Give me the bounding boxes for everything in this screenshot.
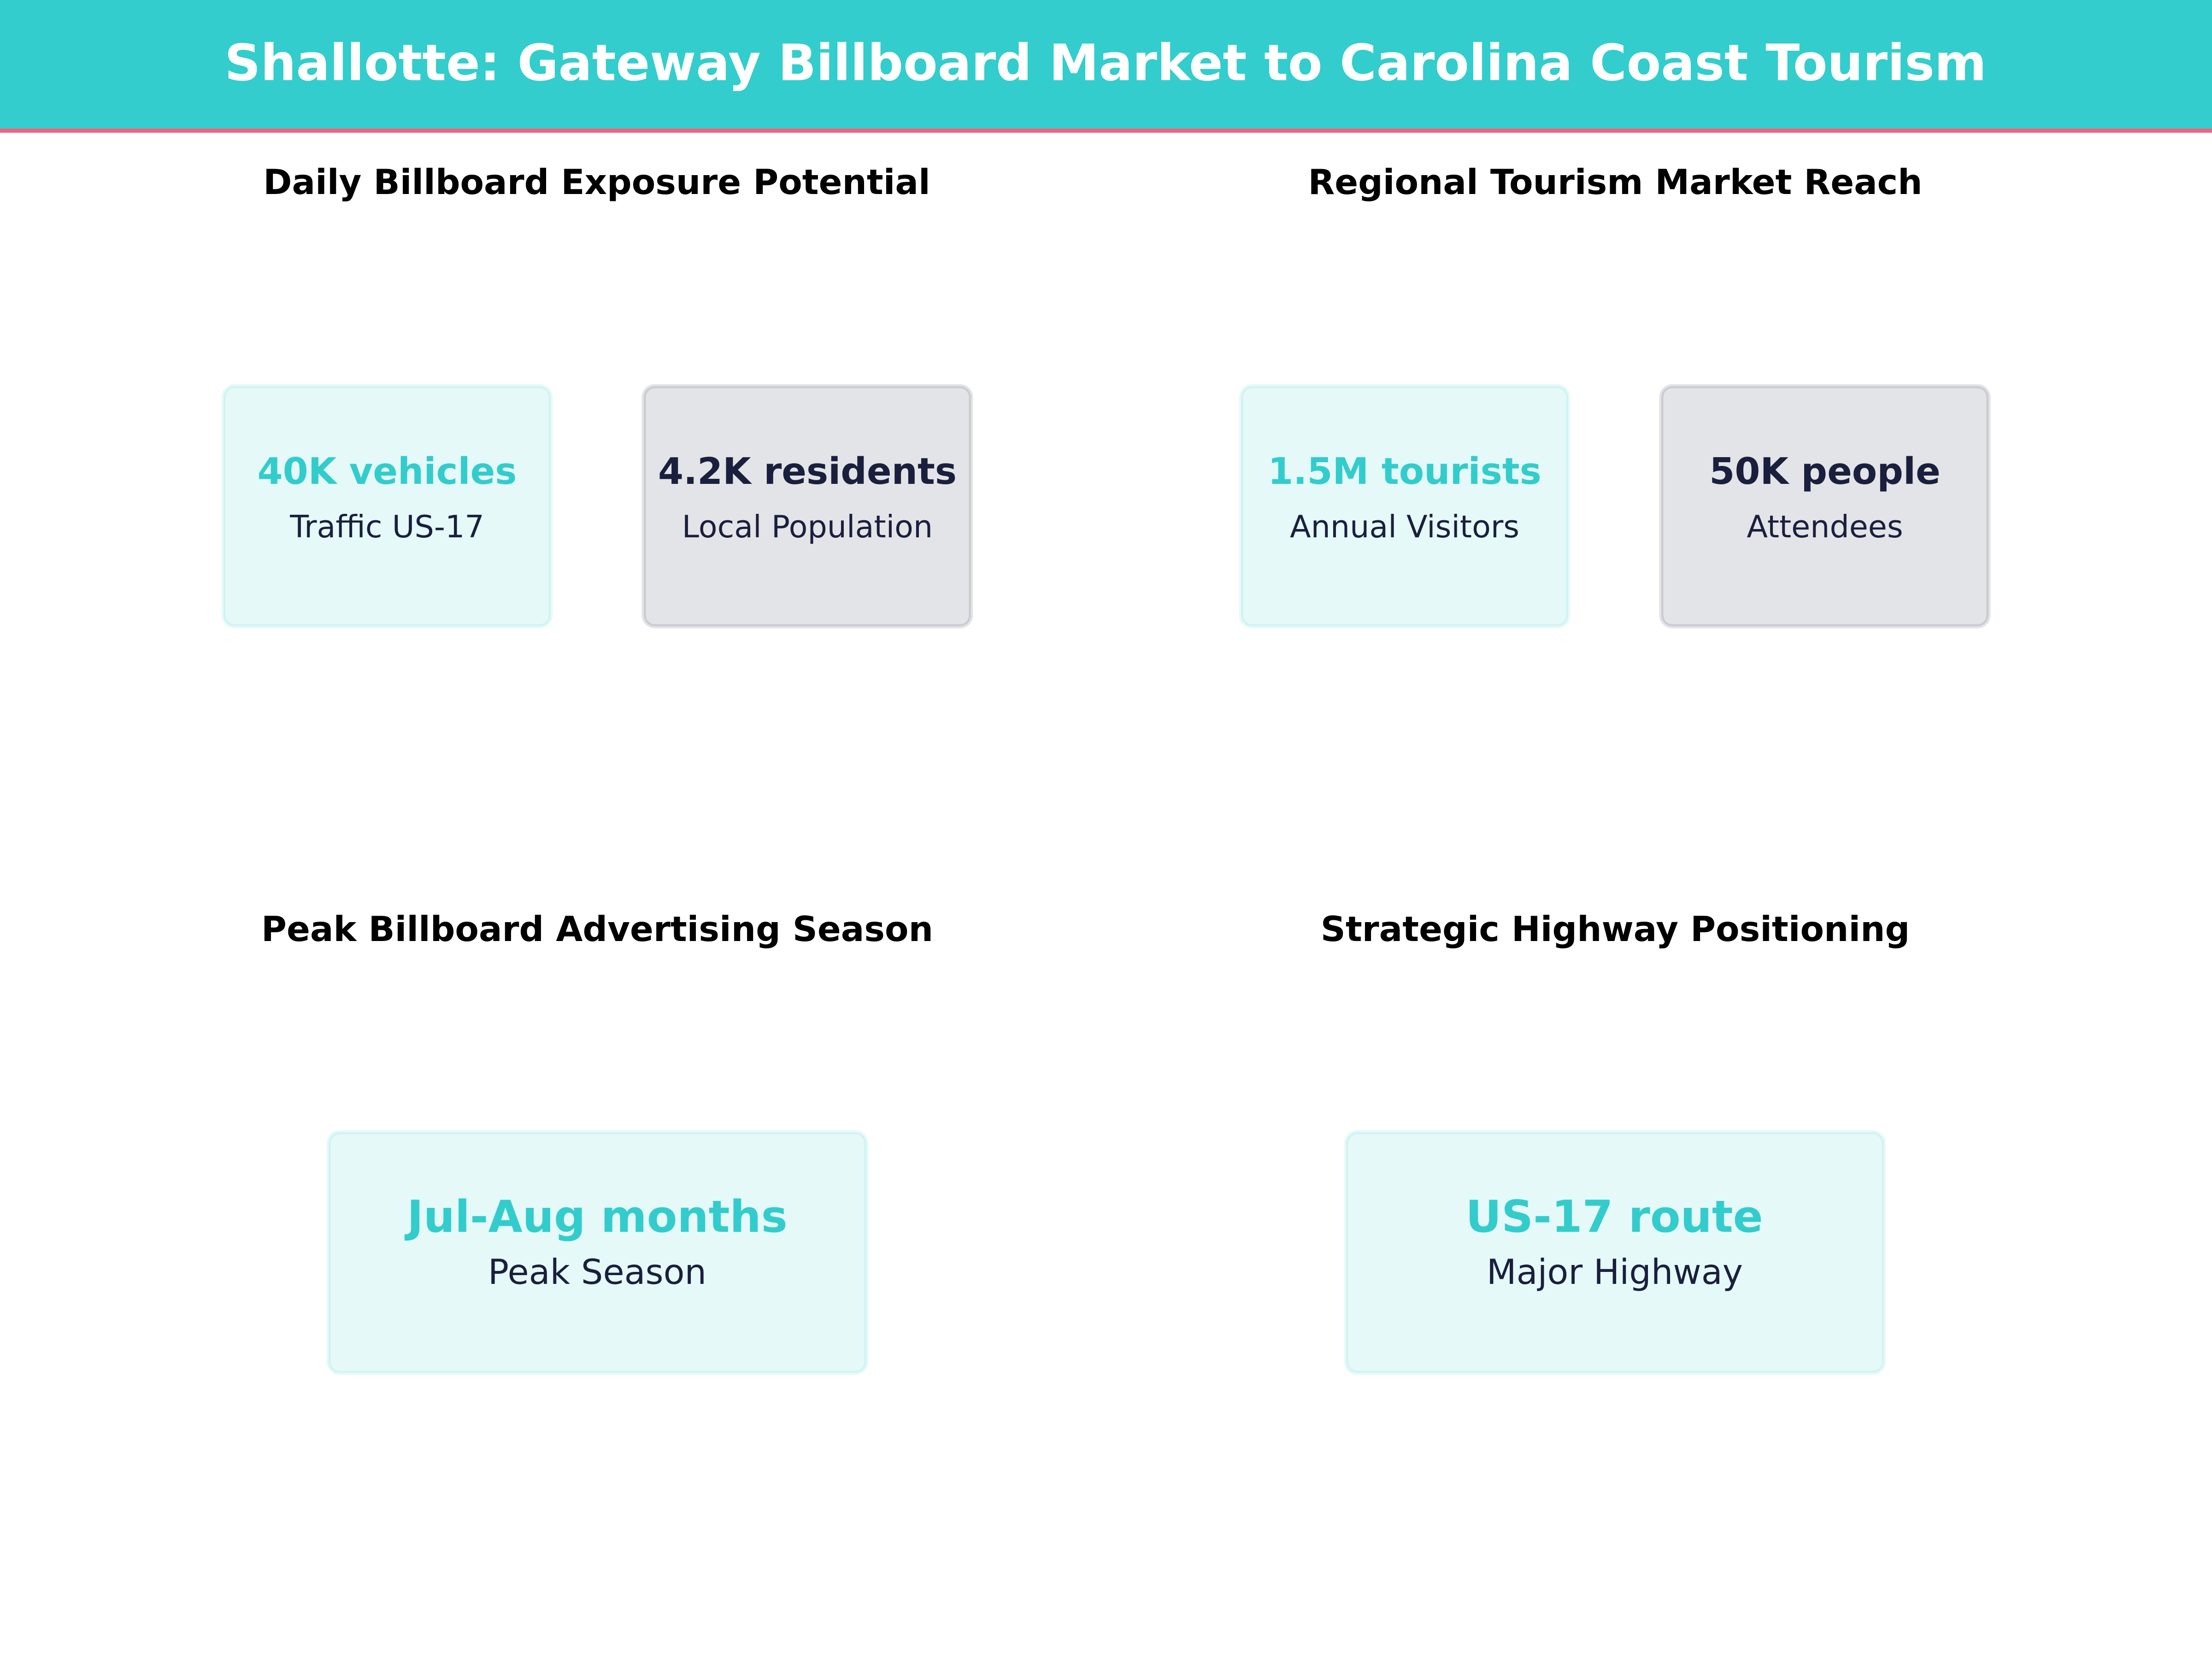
- stat card: attendees: 50K people: [1709, 450, 1941, 493]
- title: Shallotte: Gateway Billboard Market to Carolina Coast Tourism: [224, 34, 1987, 92]
- header banner: [0, 0, 2212, 133]
- stat card: population: [644, 386, 971, 626]
- panel: daily billboard exposure: [224, 162, 971, 626]
- stat card: visitors: [1241, 386, 1568, 626]
- stat card: traffic: Traffic US-17: [289, 509, 484, 545]
- stat card: peak season: Peak Season: [488, 1252, 706, 1292]
- heading: regional tourism reach: Regional Tourism Market Reach: [1308, 162, 1923, 202]
- stat card: peak season: [329, 1132, 866, 1373]
- stat card: highway: US-17 route: [1465, 1191, 1763, 1242]
- stat card: attendees: Attendees: [1747, 509, 1903, 545]
- stat card: visitors: Annual Visitors: [1290, 509, 1519, 545]
- stat card: traffic: [224, 386, 551, 626]
- panel: regional tourism reach: [1241, 162, 1988, 626]
- stat card: visitors: 1.5M tourists: [1268, 450, 1541, 493]
- heading: highway positioning: Strategic Highway Positioning: [1321, 909, 1910, 949]
- stat card: population: 4.2K residents: [658, 450, 957, 493]
- stat card: peak season: Jul-Aug months: [404, 1191, 788, 1242]
- panel: peak season: [261, 909, 933, 1373]
- stat card: highway: [1346, 1132, 1884, 1373]
- panel: highway positioning: [1321, 909, 1910, 1373]
- stat card: attendees: [1661, 386, 1988, 626]
- heading: daily billboard exposure: Daily Billboard Exposure Potential: [263, 162, 930, 202]
- stat card: population: Local Population: [682, 509, 933, 545]
- heading: peak season: Peak Billboard Advertising Season: [261, 909, 933, 949]
- stat card: highway: Major Highway: [1487, 1252, 1743, 1292]
- stat card: traffic: 40K vehicles: [258, 450, 517, 493]
